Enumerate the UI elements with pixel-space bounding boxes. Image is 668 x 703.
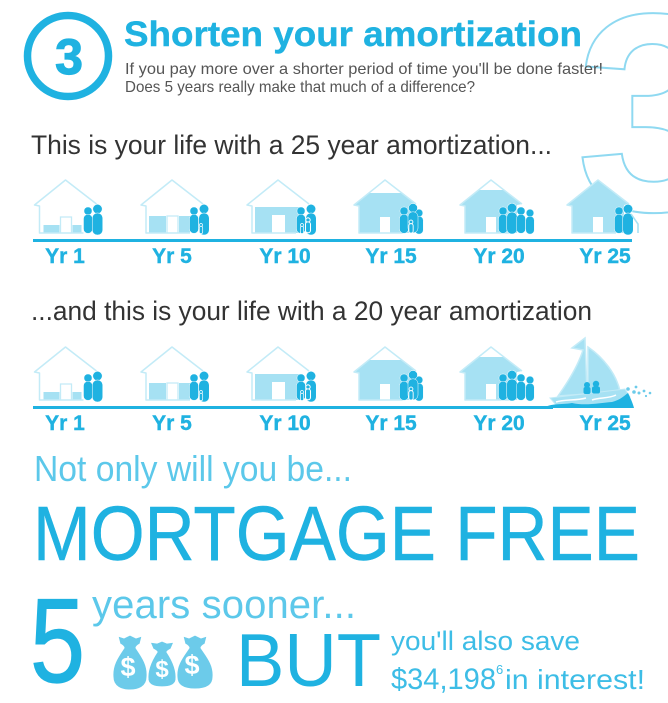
lead-in text: Not only will you be...	[34, 448, 352, 489]
circled number badge	[28, 16, 108, 96]
intro text: Does 5 years really make that much of a difference?	[125, 79, 475, 96]
timeline line	[33, 406, 553, 409]
intro text: If you pay more over a shorter period of time you'll be done faster!	[125, 61, 603, 78]
circled number badge: 3	[55, 29, 83, 85]
heading: 25 year amortization: This is your life with a 25 year amortization...	[31, 130, 552, 160]
year labels: Yr 5	[152, 412, 192, 435]
title: Shorten your amortization	[124, 15, 582, 54]
house: year 25	[566, 180, 638, 235]
year labels: Yr 15	[365, 412, 417, 435]
house: year 15	[353, 180, 423, 234]
house: year 5	[141, 347, 209, 402]
house: year 20	[459, 347, 534, 401]
year labels: Yr 10	[259, 412, 311, 435]
year labels: Yr 25	[579, 245, 631, 268]
money bag: left: $	[120, 652, 136, 682]
house: year 1	[34, 180, 103, 235]
icon: money bags	[113, 635, 213, 690]
house: year 20	[459, 180, 534, 234]
house: year 15	[353, 347, 423, 401]
money bag: right: $	[184, 650, 200, 680]
savings text: you'll also save	[391, 626, 580, 656]
savings text: 6	[496, 662, 503, 677]
year labels: Yr 15	[365, 245, 417, 268]
year labels: Yr 5	[152, 245, 192, 268]
house: year 10	[247, 180, 316, 235]
but text: BUT	[236, 618, 381, 702]
year labels: Yr 20	[473, 245, 525, 268]
year labels: Yr 1	[45, 412, 85, 435]
year labels: Yr 25	[579, 412, 631, 435]
icon: sailboat on wave	[543, 338, 651, 408]
year labels	[45, 412, 631, 435]
intro text	[125, 61, 603, 96]
year labels	[45, 245, 631, 268]
year labels: Yr 20	[473, 412, 525, 435]
savings text: in interest!	[505, 664, 645, 695]
heading: 20 year amortization: ...and this is your life with a 20 year amortization	[31, 296, 592, 326]
year labels: Yr 10	[259, 245, 311, 268]
timeline: 25 year amortization	[33, 180, 638, 268]
years sooner text: years sooner...	[92, 583, 356, 627]
savings text	[391, 626, 645, 696]
timeline line	[33, 239, 632, 242]
house: year 10	[247, 347, 316, 402]
timeline: 20 year amortization	[33, 338, 651, 435]
house: year 1	[34, 347, 103, 402]
money bag: middle: $	[155, 656, 169, 683]
year labels: Yr 1	[45, 245, 85, 268]
savings text: $34,198	[391, 663, 496, 696]
house: year 5	[141, 180, 209, 235]
